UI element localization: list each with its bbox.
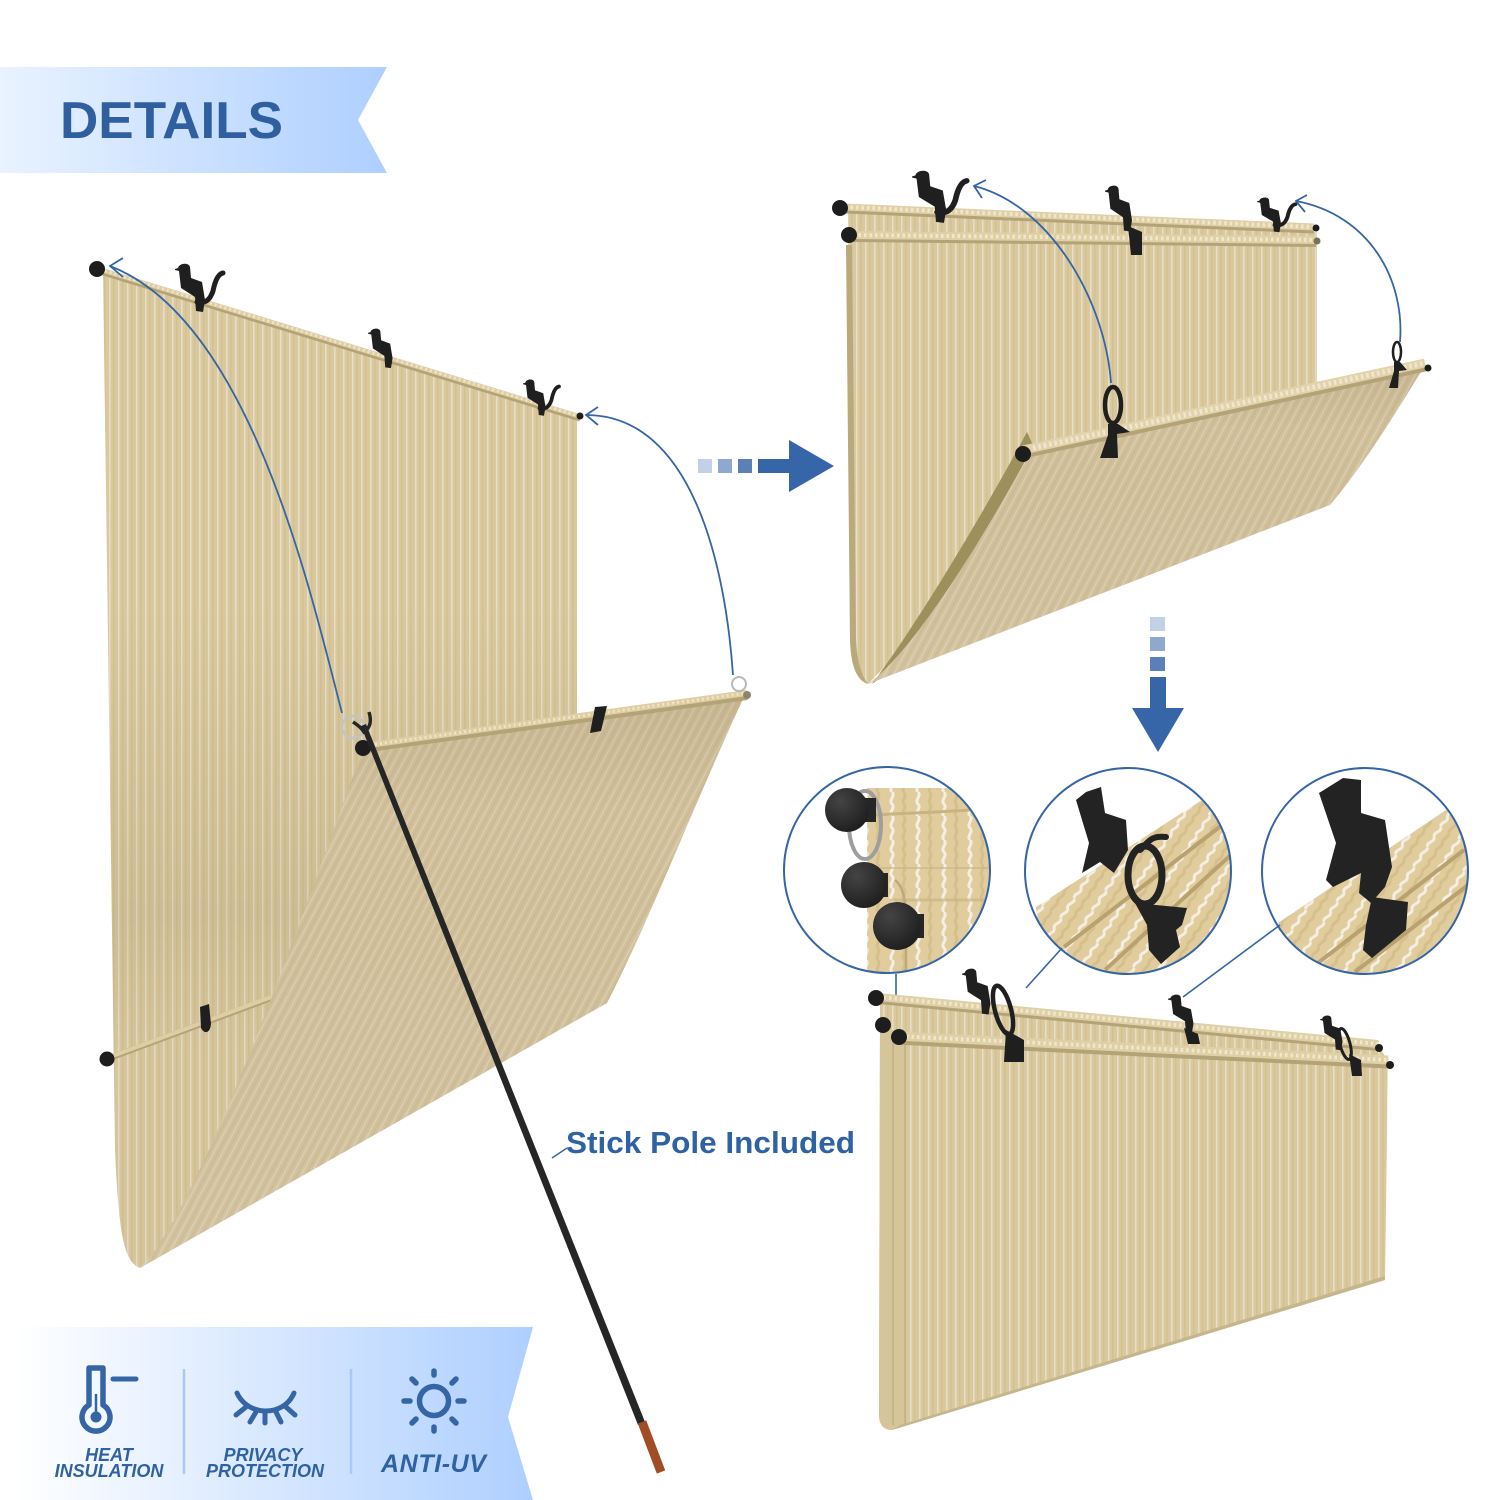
back panel <box>103 272 577 1268</box>
label: stick pole included: Stick Pole Included <box>566 1125 855 1160</box>
top rod <box>89 261 584 420</box>
stick pole <box>353 712 661 1472</box>
inset: knobs and ring <box>780 760 997 980</box>
hooks on top rod <box>175 264 559 416</box>
back panel <box>848 212 1317 684</box>
front rod <box>362 677 751 749</box>
inset: ring clip on folded rods <box>1024 767 1232 975</box>
leader lines from insets <box>896 925 1280 1016</box>
label: anti-uv: ANTI-UV <box>380 1450 488 1478</box>
front fold panel <box>140 695 745 1268</box>
divider one <box>183 1369 185 1474</box>
front fold panel <box>868 365 1425 684</box>
lower rod <box>100 996 274 1066</box>
heading: details: DETAILS <box>60 92 283 150</box>
label: privacy protection: PRIVACY <box>224 1445 304 1465</box>
icon: sun <box>404 1371 464 1431</box>
hooks <box>962 969 1362 1076</box>
label: privacy protection: PROTECTION <box>206 1461 325 1481</box>
shade: bottom right, rolled up <box>868 969 1394 1430</box>
arrow: dashed right step <box>698 440 834 492</box>
arrow: dashed down step <box>1132 617 1184 752</box>
inset: bracket and square clip <box>1258 760 1475 980</box>
banner: details <box>0 67 387 173</box>
inner fold strip <box>872 432 1036 684</box>
rods <box>832 200 1320 244</box>
front rod <box>1015 363 1432 462</box>
arrow: front clip to top hook <box>974 180 1111 383</box>
divider two <box>350 1369 352 1474</box>
bottom edge <box>892 1276 1385 1430</box>
label: heat insulation: INSULATION <box>55 1461 164 1481</box>
banner: features <box>0 1327 533 1500</box>
arrow: right clip to top hook <box>1296 195 1400 342</box>
main panel <box>879 996 1388 1430</box>
icon: thermometer <box>82 1368 136 1431</box>
arrow: right rod end to top corner <box>586 407 733 675</box>
label: heat insulation: HEAT <box>85 1445 135 1465</box>
rods <box>868 990 1394 1069</box>
shade: left, unrolled with pole <box>89 261 751 1472</box>
shade: top right, folded once <box>832 171 1432 684</box>
hooks <box>912 171 1295 255</box>
icon: closed eye <box>236 1393 295 1423</box>
ring and knob <box>342 716 371 756</box>
arrow: left pole knob to top corner <box>110 258 342 713</box>
ring clips <box>1100 342 1407 458</box>
left fold layers <box>879 1030 905 1430</box>
left edge shadow <box>846 245 868 684</box>
